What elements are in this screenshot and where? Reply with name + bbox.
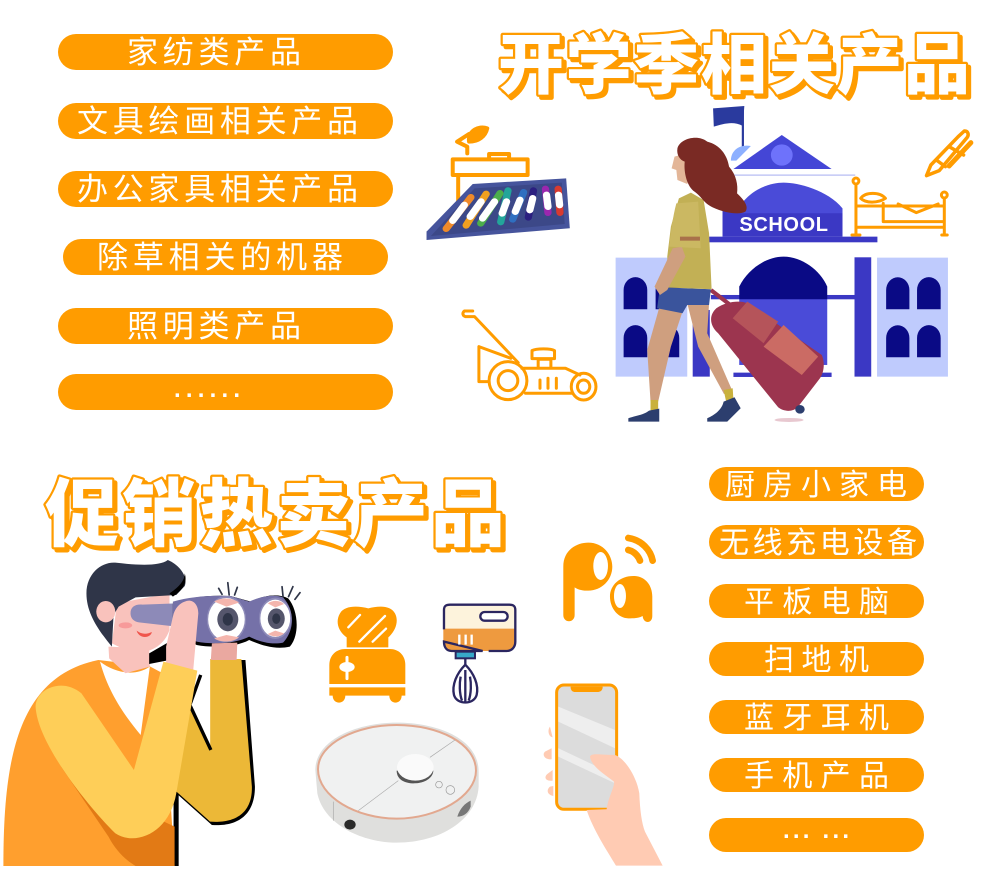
pill: bluetooth earphones: 蓝牙耳机 (744, 702, 889, 735)
icon: paint tray with lectern (427, 127, 570, 240)
pill: more: ... ... (783, 817, 849, 844)
icon: wireless earbuds (563, 538, 653, 622)
label: school sign: SCHOOL (739, 214, 829, 236)
icon: toaster (329, 607, 405, 703)
illustration: girl with suitcase (628, 138, 824, 422)
pill: robot vacuums: 扫地机 (764, 644, 869, 677)
title: promotional hot sellers: 促销热卖产品 (45, 473, 505, 556)
pill: home textiles: 家纺类产品 (127, 35, 301, 70)
icon: robot vacuum (315, 723, 479, 843)
pill: weeding machines: 除草相关的机器 (97, 240, 343, 275)
pill: office furniture: 办公家具相关产品 (77, 172, 358, 207)
illustration: school building (616, 106, 948, 377)
pill: lighting: 照明类产品 (127, 309, 301, 344)
title: back-to-school products: 开学季相关产品 (498, 28, 970, 102)
pill: mobile phones (709, 758, 924, 793)
pill: bluetooth earphones (709, 700, 924, 735)
icon: hand mixer (443, 604, 516, 702)
icon: bed (852, 178, 947, 235)
pill: home textiles (58, 34, 393, 70)
pill: more: ...... (174, 376, 240, 403)
pill: more (58, 374, 393, 410)
icon: pen (926, 131, 971, 176)
pill: small kitchen appliances: 厨房小家电 (725, 469, 907, 502)
pill: mobile phones: 手机产品 (744, 760, 889, 793)
panel: hot product list (709, 467, 924, 852)
pill: tablets (709, 584, 924, 619)
pill: wireless chargers: 无线充电设备 (719, 527, 917, 560)
panel: back-to-school product list (58, 34, 393, 410)
icon: hand holding phone (544, 685, 663, 866)
illustration: man with binoculars (3, 560, 300, 866)
pill: lighting (58, 308, 393, 344)
pill: robot vacuums (709, 642, 924, 677)
pill: stationery and painting: 文具绘画相关产品 (77, 104, 358, 139)
pill: more (709, 817, 924, 852)
pill: tablets: 平板电脑 (744, 586, 889, 619)
icon: lawn mower (463, 311, 596, 400)
